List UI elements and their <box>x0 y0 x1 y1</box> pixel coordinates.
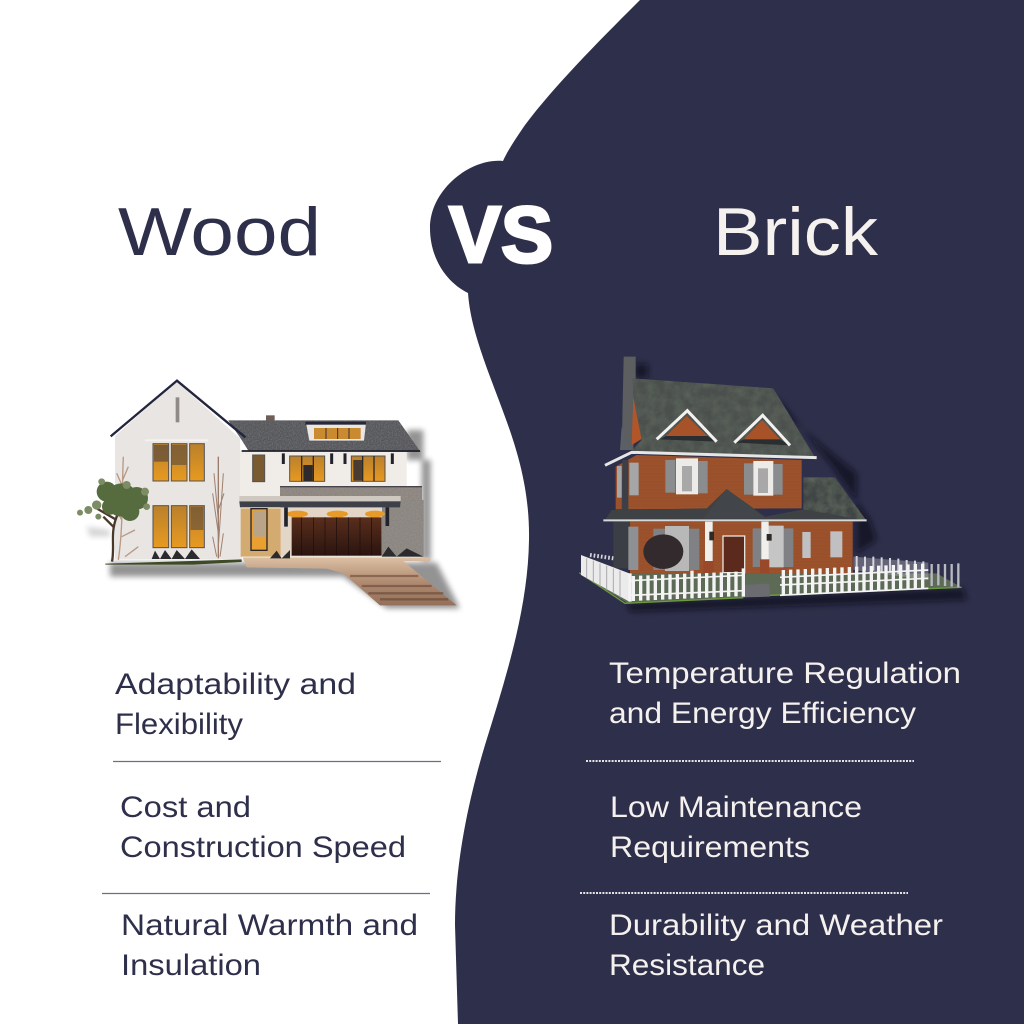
VS badge text: VS <box>449 190 553 279</box>
item: adaptability: Adaptability and <box>115 668 356 701</box>
upper roof <box>632 378 815 457</box>
porch columns and door <box>703 522 772 583</box>
garage door <box>292 517 382 556</box>
left fence <box>581 555 629 602</box>
slim tree <box>213 457 224 558</box>
item: warmth: Insulation <box>121 949 261 982</box>
shrub <box>643 534 683 569</box>
background panel: brick side <box>430 0 1024 1024</box>
lower windows <box>628 526 842 571</box>
wing wall <box>240 451 407 497</box>
item: temperature: Temperature Regulation <box>609 657 961 690</box>
wood list <box>115 668 418 982</box>
lawn <box>580 573 962 603</box>
main roof <box>228 420 421 452</box>
landscaping <box>105 559 242 565</box>
item: warmth: Natural Warmth and <box>121 909 418 942</box>
item: cost: Cost and <box>120 791 251 824</box>
eave brackets <box>283 453 392 464</box>
porch canopy <box>239 496 401 501</box>
item: cost: Construction Speed <box>120 831 406 864</box>
front door <box>251 509 267 550</box>
title: Brick: Brick <box>713 194 879 270</box>
porch wall <box>281 507 382 557</box>
tree <box>77 457 150 562</box>
upper brick wall <box>616 455 802 509</box>
dormer <box>306 423 366 441</box>
title: Wood: Wood <box>118 194 321 270</box>
brick list <box>609 657 961 982</box>
stone wall <box>280 487 422 501</box>
tall windows <box>153 444 385 548</box>
back fence <box>853 556 958 587</box>
side gable brick <box>632 397 643 445</box>
item: temperature: and Energy Efficiency <box>609 697 916 730</box>
item: adaptability: Flexibility <box>115 708 243 741</box>
lower brick wall <box>630 522 853 582</box>
illustration: brick house <box>579 357 967 612</box>
item: maintenance: Requirements <box>610 831 810 864</box>
driveway <box>243 557 457 605</box>
house shadow <box>87 430 460 608</box>
dormers <box>657 411 790 445</box>
chimney <box>622 357 636 450</box>
illustration: wood house <box>77 381 460 608</box>
item: maintenance: Low Maintenance <box>610 791 862 824</box>
upper windows <box>617 458 783 498</box>
item: durability: Durability and Weather <box>609 909 943 942</box>
porch roof <box>605 489 863 520</box>
side roof <box>803 477 866 520</box>
house shadow <box>627 364 967 612</box>
upper eave <box>605 452 817 465</box>
gable roof edge <box>111 381 245 437</box>
front fence <box>630 564 928 602</box>
gable body <box>115 382 242 559</box>
item: durability: Resistance <box>609 949 765 982</box>
